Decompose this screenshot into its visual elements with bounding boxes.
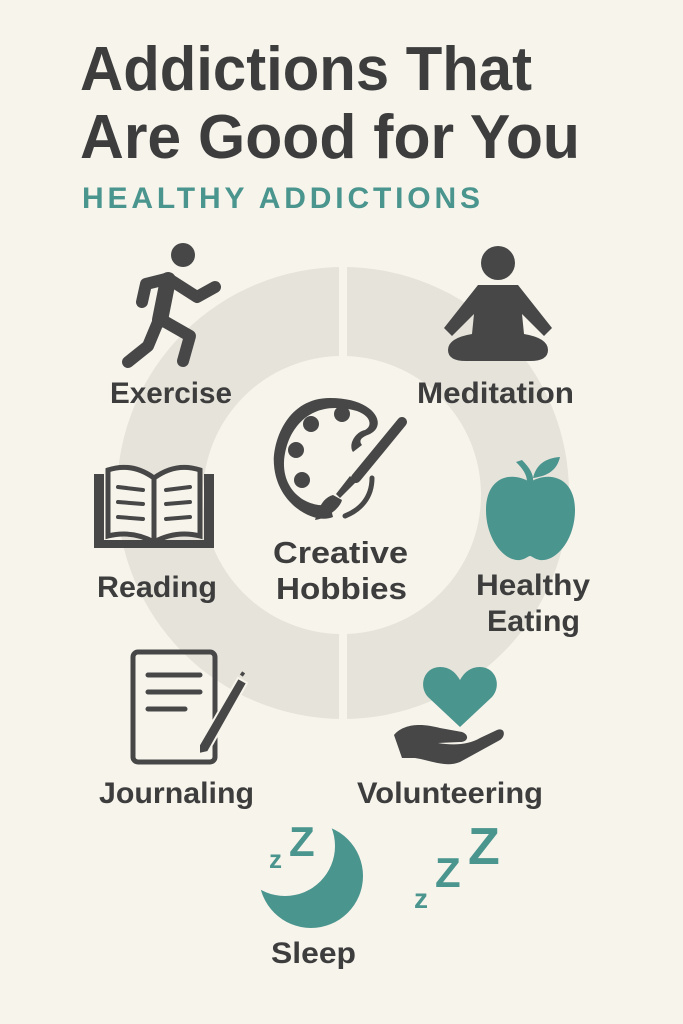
- title: [80, 35, 580, 172]
- title: Are Good for You: [80, 103, 580, 172]
- icon: moon: [259, 824, 363, 928]
- subtitle: HEALTHY ADDICTIONS: [82, 182, 480, 215]
- label: Sleep: Sleep: [271, 937, 356, 970]
- icon: heart in hand: [394, 667, 504, 764]
- label: Healthy Eating: Healthy: [476, 569, 590, 602]
- icon: zzz right: Z: [435, 849, 461, 896]
- icon: zz left: Z: [289, 818, 315, 865]
- icon: runner: [128, 243, 215, 362]
- label: Exercise: Exercise: [110, 377, 232, 410]
- label: Creative Hobbies: Hobbies: [276, 571, 407, 606]
- icon: palette: [274, 398, 402, 520]
- title: Addictions That: [80, 35, 532, 104]
- label: Healthy Eating: Eating: [487, 605, 580, 638]
- icon: meditation: [444, 246, 552, 361]
- label: Reading: Reading: [97, 571, 217, 604]
- label: Meditation: Meditation: [417, 377, 574, 410]
- label: Creative Hobbies: [273, 535, 408, 606]
- donut ring: [117, 262, 569, 723]
- icon: book: [94, 467, 214, 548]
- icon: zz left: [269, 818, 315, 874]
- label: Journaling: Journaling: [99, 777, 254, 810]
- icon: zzz right: Z: [468, 818, 500, 876]
- icon: zzz right: z: [414, 883, 428, 914]
- icon: journal: [133, 652, 247, 762]
- icon: zz left: z: [269, 844, 282, 874]
- label: Creative Hobbies: Creative: [273, 535, 408, 570]
- icon: apple: [486, 457, 575, 560]
- label: Volunteering: Volunteering: [357, 777, 543, 810]
- label: Healthy Eating: [476, 569, 590, 638]
- icon: zzz right: [414, 818, 500, 914]
